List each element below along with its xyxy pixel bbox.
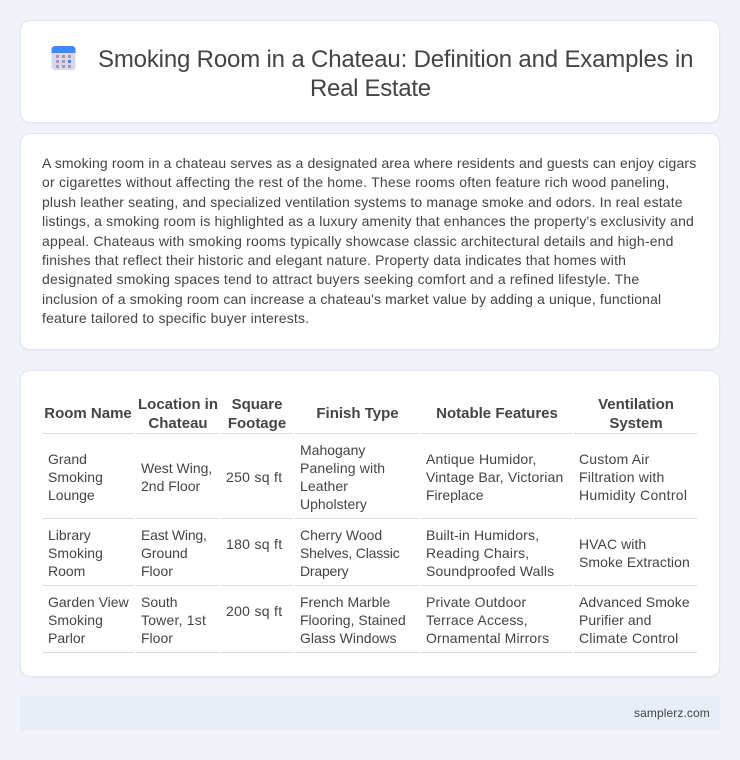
text block: introduction: A smoking room in a chateau serves as a designated area where residents and guests can enjoy cigars bbox=[42, 155, 696, 171]
row 3 cells: Ornamental Mirrors bbox=[426, 630, 549, 646]
header: square footage bbox=[228, 396, 286, 432]
text block: introduction: inclusion of a smoking room can increase a chateau's market value by adding a unique, functional bbox=[42, 291, 661, 307]
row 3 cells bbox=[48, 594, 690, 646]
row 2 cells: Ground bbox=[141, 545, 188, 561]
row 2 cells: Cherry Wood bbox=[300, 527, 382, 543]
row 3 cells: Advanced Smoke bbox=[579, 594, 690, 610]
header: finish type: Finish Type bbox=[316, 405, 399, 422]
text block: introduction: listings, a smoking room is highlighted as a luxury amenity that enhances the property's exclusivity and bbox=[42, 213, 694, 229]
row 3 cells: Garden View bbox=[48, 594, 129, 610]
row 3 cells: Terrace Access, bbox=[426, 612, 528, 628]
panel: introduction card bbox=[20, 133, 720, 350]
row 1 cells: Antique Humidor, bbox=[426, 451, 537, 467]
row 2 cells: Drapery bbox=[300, 563, 348, 579]
header: location: Chateau bbox=[148, 415, 208, 432]
row 2 cells: Soundproofed Walls bbox=[426, 563, 554, 579]
row 3 cells: Climate Control bbox=[579, 630, 678, 646]
row 1 cells: 2nd Floor bbox=[141, 478, 200, 494]
row 1 cells: Leather bbox=[300, 478, 348, 494]
header: ventilation: System bbox=[609, 415, 663, 432]
row 3 cells: Floor bbox=[141, 630, 173, 646]
footer credit: samplerz.com bbox=[634, 706, 710, 720]
row 1 cells: Grand bbox=[48, 451, 87, 467]
text block: introduction: designated smoking spaces tend to attract buyers seeking comfort and a refined lifestyle. The bbox=[42, 271, 639, 287]
row 2 cells: Smoke Extraction bbox=[579, 554, 690, 570]
row 2 cells: Library bbox=[48, 527, 91, 543]
row 1 cells: Fireplace bbox=[426, 487, 484, 503]
panel: title card bbox=[20, 20, 720, 123]
row 1 cells: Filtration with bbox=[579, 469, 664, 485]
header: notable features: Notable Features bbox=[436, 405, 558, 422]
text block: introduction: finishes that reflect their historic and elegant nature. Property data indicates that homes with bbox=[42, 252, 626, 268]
text block: introduction: plush leather seating, and specialized ventilation systems to manage smoke and odors. In real estate bbox=[42, 194, 683, 210]
row 1 cells: Custom Air bbox=[579, 451, 649, 467]
header: square footage: Footage bbox=[228, 415, 286, 432]
row 3 cells: Private Outdoor bbox=[426, 594, 526, 610]
header: room name: Room Name bbox=[44, 405, 132, 422]
row 2 cells: HVAC with bbox=[579, 536, 646, 552]
row 1 cells: Lounge bbox=[48, 487, 95, 503]
row 3 cells: 200 sq ft bbox=[226, 603, 282, 619]
title bbox=[98, 46, 693, 102]
row 1 cells: Vintage Bar, Victorian bbox=[426, 469, 563, 485]
text block: introduction bbox=[42, 155, 696, 326]
row 3 cells: South bbox=[141, 594, 178, 610]
row 1 cells: 250 sq ft bbox=[226, 469, 282, 485]
header: square footage: Square bbox=[232, 396, 282, 413]
text block: introduction: or cigarettes without affecting the rest of the home. These rooms often feature rich wood paneling, bbox=[42, 174, 669, 190]
header: location: Location in bbox=[138, 396, 218, 413]
row 2 cells: Shelves, Classic bbox=[300, 545, 400, 561]
row 3 cells: Tower, 1st bbox=[141, 612, 206, 628]
table: smoking rooms bbox=[43, 396, 697, 653]
header: location bbox=[138, 396, 218, 432]
icon: calendar grid bbox=[52, 46, 76, 70]
title: Smoking Room in a Chateau: Definition and Examples in bbox=[98, 46, 693, 73]
text block: introduction: appeal. Chateaus with smoking rooms typically showcase classic architectural details and high-end bbox=[42, 233, 674, 249]
row 2 cells: Floor bbox=[141, 563, 173, 579]
row 2 cells: East Wing, bbox=[141, 527, 207, 543]
row 3 cells: Glass Windows bbox=[300, 630, 396, 646]
row 1 cells bbox=[48, 442, 687, 512]
header: ventilation bbox=[598, 396, 674, 432]
row 3 cells: Purifier and bbox=[579, 612, 651, 628]
row 1 cells: Upholstery bbox=[300, 496, 367, 512]
row 1 cells: West Wing, bbox=[141, 460, 212, 476]
footer bar bbox=[20, 696, 720, 730]
row 2 cells: Reading Chairs, bbox=[426, 545, 529, 561]
header: ventilation: Ventilation bbox=[598, 396, 674, 413]
row 3 cells: Flooring, Stained bbox=[300, 612, 406, 628]
row 2 cells bbox=[48, 527, 690, 579]
row 2 cells: Room bbox=[48, 563, 85, 579]
row 1 cells: Mahogany bbox=[300, 442, 365, 458]
row 3 cells: Parlor bbox=[48, 630, 85, 646]
row 1 cells: Humidity Control bbox=[579, 487, 687, 503]
row 2 cells: Built-in Humidors, bbox=[426, 527, 539, 543]
row 1 cells: Paneling with bbox=[300, 460, 385, 476]
title: Real Estate bbox=[310, 75, 431, 102]
row 1 cells: Smoking bbox=[48, 469, 103, 485]
row 3 cells: French Marble bbox=[300, 594, 390, 610]
row 2 cells: 180 sq ft bbox=[226, 536, 282, 552]
row 3 cells: Smoking bbox=[48, 612, 103, 628]
panel: table card bbox=[20, 370, 720, 677]
row 2 cells: Smoking bbox=[48, 545, 103, 561]
text block: introduction: feature tailored to specific buyer interests. bbox=[42, 310, 309, 326]
